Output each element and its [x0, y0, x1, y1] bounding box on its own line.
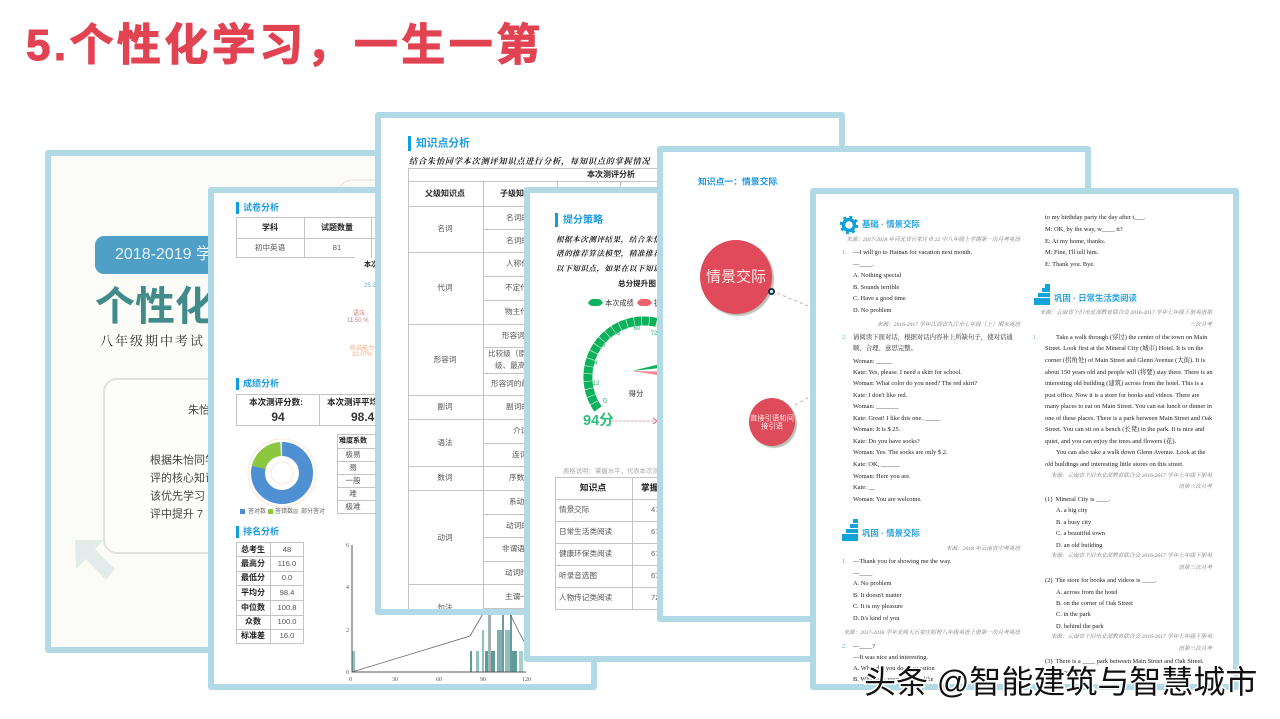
- strategy text: 根据本次测评结果，结合朱怡同学: [556, 235, 677, 244]
- left column exercises: Kate: __: [853, 484, 875, 491]
- left column second exercises: B. It doesn't matter: [853, 592, 902, 599]
- knowledge table: 数词: [437, 473, 453, 482]
- cover body text: 评的核心知识: [150, 472, 216, 484]
- right column passage: many places to eat on Main Street. You can eat lunch or dinner in: [1045, 403, 1212, 410]
- right column questions: D. behind the park: [1056, 623, 1104, 630]
- table: difficulty: 极难: [345, 502, 361, 511]
- right column questions: 语第三次月考: [1178, 484, 1212, 490]
- right column questions: (3) There is a ____ park between Main Street and Oak Street.: [1045, 658, 1204, 665]
- watermark: 头条 @智能建筑与智慧城市: [864, 664, 1257, 700]
- gauge legend: 本次成绩: [605, 298, 634, 307]
- gauge title: 总分提升图: [618, 279, 656, 288]
- node: situational communication: [700, 240, 772, 314]
- right column passage: You can also take a walk down Glenn Avenue. Look at the: [1056, 449, 1205, 456]
- left column second exercises: 2.: [842, 643, 847, 650]
- knowledge table: 父级知识点: [425, 189, 465, 198]
- left column second exercises: D. It's kind of you: [853, 615, 899, 622]
- heading: basic: 基础 · 情景交际: [862, 219, 920, 229]
- left column exercises: A. Nothing special: [853, 272, 901, 279]
- right column dialogue: to my birthday party the day after t___.: [1045, 214, 1145, 221]
- right column passage: Take a walk through (穿过) the center of the town on Main: [1056, 334, 1207, 341]
- right column dialogue: E: Thank you. Bye.: [1045, 261, 1095, 268]
- left column second exercises: 来源：2017-2018 学年北师大石家庄附校八年级英语上册第一次月考英语: [843, 630, 1020, 636]
- right column questions: 语第三次月考: [1178, 646, 1212, 652]
- table: ranking stats: 众数: [245, 617, 261, 626]
- gauge legend: 提升: [654, 298, 668, 307]
- left column second exercises: —Thank you for showing me the way.: [853, 558, 951, 565]
- right column questions: D. an old building: [1056, 542, 1103, 549]
- left column exercises: 1.: [842, 249, 847, 256]
- left column exercises: Kate: OK, ______: [853, 461, 900, 468]
- left column exercises: Kate: Do you have socks?: [853, 438, 920, 445]
- table: ranking stats: 100.0: [277, 617, 297, 626]
- table: ranking stats: 100.8: [277, 603, 297, 612]
- left column second exercises: A. What did you do on vacation: [853, 665, 935, 672]
- knowledge table: 动词的用: [506, 521, 536, 530]
- table: ranking stats: 平均分: [241, 588, 265, 597]
- right column dialogue: E: At my home, thanks.: [1045, 238, 1105, 245]
- cover body text: 评中提升 7: [150, 508, 203, 520]
- gauge chart: 72: [651, 331, 658, 337]
- left column second exercises: —It was nice and interesting.: [853, 654, 928, 661]
- right column passage: Street. Look first at the Mineral City (城市) Hotel. It is on the: [1045, 345, 1203, 352]
- table: ranking stats: 0.0: [282, 573, 292, 582]
- table: mastery: 情景交际: [559, 505, 589, 514]
- panel: report cover: [45, 150, 705, 653]
- right column passage: one of these places. There is a park between Main Street and Oak: [1045, 415, 1212, 422]
- table: score summary: 本次测评平均分: [327, 397, 387, 407]
- left column exercises: Woman: Here you are.: [853, 473, 911, 480]
- knowledge table: 连词用: [512, 450, 535, 459]
- table: ranking stats: 116.0: [278, 559, 296, 568]
- gauge chart: 36: [599, 343, 606, 349]
- left column exercises: Woman: What color do you need? The red skirt?: [853, 380, 977, 387]
- knowledge table: 非谓语动: [502, 544, 532, 553]
- table: ranking stats: 98.4: [280, 588, 294, 597]
- left column exercises: 来源：2017-2018 年河北省石家庄市 22 中八年级上学期第一次月考英语: [846, 237, 1020, 243]
- left column exercises: 请阅读下面对话，根据对话内容补上所缺句子，使对话通: [853, 334, 1013, 341]
- table: mastery: 掌握水平: [641, 483, 676, 493]
- cover banner: [95, 236, 375, 274]
- node: direct and indirect speech: 接引语: [761, 421, 783, 430]
- heading: score analysis: 成绩分析: [243, 378, 279, 388]
- right column passage: 1.: [1033, 334, 1038, 341]
- knowledge table: 名词的数: [506, 213, 536, 222]
- right column questions: (2) The store for books and videos is ____.: [1045, 577, 1156, 584]
- table: difficulty: 一般: [345, 476, 361, 485]
- knowledge table: 动词: [437, 533, 453, 542]
- left column exercises: 2.: [842, 334, 847, 341]
- right column passage: 三次月考: [1190, 322, 1212, 328]
- left column exercises: Woman: _____: [853, 358, 892, 365]
- knowledge table: 不定代词: [505, 283, 535, 292]
- right column questions: 语第三次月考: [1178, 565, 1212, 571]
- title: 5.个性化学习，一生一第: [26, 21, 544, 70]
- pie chart labels: 22.07%: [352, 352, 372, 358]
- left column second exercises: B. What was your vacation like: [853, 676, 933, 683]
- left column exercises: Kate: Great! I like this one. _____: [853, 415, 940, 422]
- pie chart labels: 本次: [364, 262, 378, 268]
- left column exercises: Woman: _______: [853, 403, 898, 410]
- strategy text: 以下知识点，如果在以下知识: [556, 264, 661, 273]
- knowledge table: 形容词的: [502, 331, 532, 340]
- knowledge table: 物主代词: [505, 307, 535, 316]
- right column passage: about 150 years old and people will (将要) stay there. There is an: [1045, 369, 1213, 376]
- knowledge table: 语法: [437, 438, 453, 447]
- panel: knowledge graph: [657, 146, 1091, 622]
- table: paper summary: 初中英语: [255, 243, 285, 252]
- table: ranking stats: 最高分: [241, 559, 265, 568]
- table: difficulty: 难度系数: [339, 438, 367, 444]
- heading: daily life reading: 巩固 · 日常生活类阅读: [1054, 293, 1137, 303]
- heading: knowledge analysis: 知识点分析: [416, 138, 470, 150]
- histogram chart: 120: [522, 677, 531, 683]
- right column questions: B. on the corner of Oak Street: [1056, 600, 1133, 607]
- knowledge table: 副词的用: [506, 402, 536, 411]
- left column exercises: B. Sounds terrible: [853, 284, 899, 291]
- left column exercises: 来源：2016-2017 学年江西省九江市七年级（上）期末英语: [877, 322, 1020, 328]
- right column questions: A. across from the hotel: [1056, 589, 1118, 596]
- strategy text: 谱的推荐算法模型，精准推荐: [556, 249, 661, 258]
- panel: knowledge point analysis: [375, 112, 845, 615]
- left column exercises: Woman: You are welcome.: [853, 496, 922, 503]
- left column second exercises: A. No problem: [853, 580, 892, 587]
- gauge chart: 60: [634, 326, 641, 332]
- right column passage: corner (拐角处) of Main Street and Glenn Avenue (大街). It is: [1045, 357, 1205, 364]
- pie chart labels: 语法: [353, 311, 365, 317]
- table: mastery: 人物传记类阅读: [559, 593, 612, 602]
- node handle: [768, 288, 775, 295]
- cover subtitle: 八年级期中考试: [100, 334, 205, 348]
- left column second exercises: —____?: [853, 643, 875, 650]
- knowledge table: 系动词: [509, 497, 532, 506]
- intro text: 结合朱怡同学本次测评知识点进行分析，每知识点的掌握情况: [409, 157, 650, 166]
- knowledge table: 副词: [437, 402, 453, 411]
- right column questions: A. a big city: [1056, 507, 1088, 514]
- table: paper summary: 81: [333, 243, 341, 252]
- right column passage: post office. Now it is a store for books and videos. There are: [1045, 392, 1200, 399]
- right column passage: quiet, and you can enjoy the trees and flowers (花).: [1045, 438, 1176, 445]
- right column passage: interesting old building (建筑) across from the hotel. This is a: [1045, 380, 1203, 387]
- right column passage: old buildings and interesting little stores on this street.: [1045, 461, 1184, 468]
- right column questions: 来源：云南省个旧市北部教育联合会 2016-2017 学年七年级下册英: [1051, 634, 1212, 640]
- node: direct and indirect speech: 直接引语和间: [750, 413, 794, 422]
- right column questions: C. in the park: [1056, 611, 1091, 618]
- score callout: 94分: [583, 413, 614, 429]
- right column questions: B. a busy city: [1056, 519, 1091, 526]
- left column exercises: 顺、合理、意思完整。: [853, 345, 917, 352]
- right column questions: C. a beautiful town: [1056, 530, 1105, 537]
- table: ranking stats: 最低分: [241, 573, 265, 582]
- table: mastery: 72: [651, 593, 659, 602]
- left column second exercises: 来源：2018 年云南省中考英语: [946, 546, 1020, 552]
- table: mastery: 67: [651, 527, 659, 536]
- cover banner: 2018-2019 学年: [115, 246, 228, 263]
- histogram chart: 4: [346, 585, 349, 591]
- knowledge table: 比较级（原级、: [488, 349, 541, 358]
- left column second exercises: 1.: [842, 558, 847, 565]
- panel: practice worksheet: [810, 188, 1239, 690]
- right column questions: 来源：云南省个旧市北部教育联合会 2016-2017 学年七年级下册英: [1051, 473, 1212, 479]
- table: paper summary: 试题数量: [321, 223, 353, 232]
- table: ranking stats: 标准差: [241, 631, 265, 640]
- knowledge table: 序数词: [509, 473, 532, 482]
- right column passage: 来源：云南省个旧市北部教育联合会 2016-2017 学年七年级下册英语第: [1040, 310, 1212, 316]
- table: mastery: 健康环保类阅读: [559, 549, 612, 558]
- table: mastery: 听录音选图: [559, 571, 597, 580]
- node: direct and indirect speech: [749, 398, 795, 446]
- node: situational communication: 情景交际: [706, 268, 766, 286]
- right column questions: (1) Mineral City is ____.: [1045, 496, 1110, 503]
- table: difficulty: 极易: [345, 450, 361, 459]
- knowledge table: 形容词: [434, 355, 456, 364]
- knowledge table: 句法: [437, 603, 453, 612]
- right column dialogue: M: Fine, I'll tell him.: [1045, 249, 1098, 256]
- cover text box: [103, 378, 407, 554]
- gauge chart: 得分: [628, 388, 644, 398]
- knowledge table: 动词时态: [505, 568, 535, 577]
- table: score summary: 98.4: [351, 410, 374, 424]
- table: score summary: 本次测评分数:: [249, 397, 303, 407]
- table: mastery: 知识点: [580, 483, 606, 493]
- knowledge table: 介词用: [513, 426, 536, 435]
- right column passage: Street. You can sit on a bench (长凳) in the park. It is nice and: [1045, 426, 1204, 433]
- gauge chart: 48: [614, 331, 621, 337]
- left column exercises: Woman: It is $ 25.: [853, 426, 900, 433]
- heading: ranking analysis: 排名分析: [243, 526, 279, 536]
- cover heading: 个性化智能: [95, 285, 295, 329]
- panel: score improvement strategy: [524, 187, 817, 662]
- pie chart labels: 11.50 %: [347, 318, 369, 324]
- knowledge table: 人称代词: [506, 259, 536, 268]
- knowledge table: 主谓一致: [505, 592, 535, 601]
- table: paper summary: 学科: [262, 223, 278, 232]
- left column exercises: Kate: Yes, please. I need a skirt for school.: [853, 369, 962, 376]
- histogram chart: 60: [436, 677, 442, 683]
- right column questions: A. new: [1056, 669, 1074, 676]
- knowledge table: 名词的格: [506, 236, 536, 245]
- table: mastery: 日常生活类阅读: [559, 527, 612, 536]
- cover name: 朱怡: [188, 404, 210, 416]
- pie chart labels: 25.2: [364, 283, 376, 289]
- knowledge table: 级、最高级: [495, 361, 533, 370]
- knowledge table: 形容词的最高: [491, 379, 537, 388]
- table: mastery: 47: [651, 505, 659, 514]
- table: difficulty: 难: [349, 489, 357, 498]
- left column exercises: C. Have a good time: [853, 295, 906, 302]
- table: mastery: 67: [651, 571, 659, 580]
- table: score summary: 94: [271, 410, 285, 424]
- left column exercises: Kate: I don't like red.: [853, 392, 907, 399]
- table: mastery: 67: [651, 549, 659, 558]
- heading: paper analysis: 试卷分析: [243, 202, 279, 212]
- knowledge table: 子级知识点: [500, 189, 540, 198]
- left column exercises: —____.: [853, 261, 874, 268]
- pie chart labels: 听说能力: [350, 346, 374, 352]
- right column questions: 来源：云南省个旧市北部教育联合会 2016-2017 学年七年级下册英: [1051, 553, 1212, 559]
- knowledge table: 名词: [437, 224, 453, 233]
- table: ranking stats: 中位数: [241, 603, 265, 612]
- knowledge graph title: 知识点一：情景交际: [698, 177, 777, 187]
- histogram chart: 90: [480, 677, 486, 683]
- panel: paper and score analysis: [208, 187, 597, 690]
- histogram chart: 0: [349, 677, 352, 683]
- left column exercises: —I will go to Hainan for vacation next month.: [853, 249, 972, 256]
- knowledge table: 代词: [437, 283, 453, 292]
- knowledge table: 本次测评分析: [587, 170, 635, 179]
- left column second exercises: —____: [853, 570, 872, 577]
- histogram chart: 6: [346, 543, 349, 549]
- cover body text: 根据朱怡同学: [150, 454, 216, 466]
- donut legend: 部分答对: [301, 509, 325, 515]
- right column dialogue: M: OK, by the way, w____ it?: [1045, 226, 1123, 233]
- table: ranking stats: 总考生: [241, 545, 265, 554]
- table: difficulty: 易: [349, 463, 357, 472]
- heading: consolidate: 巩固 · 情景交际: [862, 528, 920, 538]
- histogram chart: 30: [392, 677, 398, 683]
- cover body text: 该优先学习: [150, 490, 205, 502]
- donut legend: 答对数: [248, 509, 266, 515]
- table: ranking stats: 16.0: [280, 631, 294, 640]
- gauge chart: 12: [593, 381, 600, 387]
- histogram chart: 2: [346, 628, 349, 634]
- gauge chart: 24: [591, 361, 598, 367]
- histogram chart: 0: [346, 670, 349, 676]
- heading: strategy: 提分策略: [563, 215, 603, 226]
- left column exercises: Woman: Yes. The socks are only $ 2.: [853, 449, 948, 456]
- donut legend: 答错数: [275, 509, 293, 515]
- table: ranking stats: 48: [283, 545, 291, 554]
- gauge chart: 0: [603, 398, 607, 405]
- left column second exercises: C. It is my pleasure: [853, 603, 903, 610]
- left column exercises: D. No problem: [853, 307, 892, 314]
- table caption: 表格说明：掌握水平，代表本次测评: [563, 468, 665, 475]
